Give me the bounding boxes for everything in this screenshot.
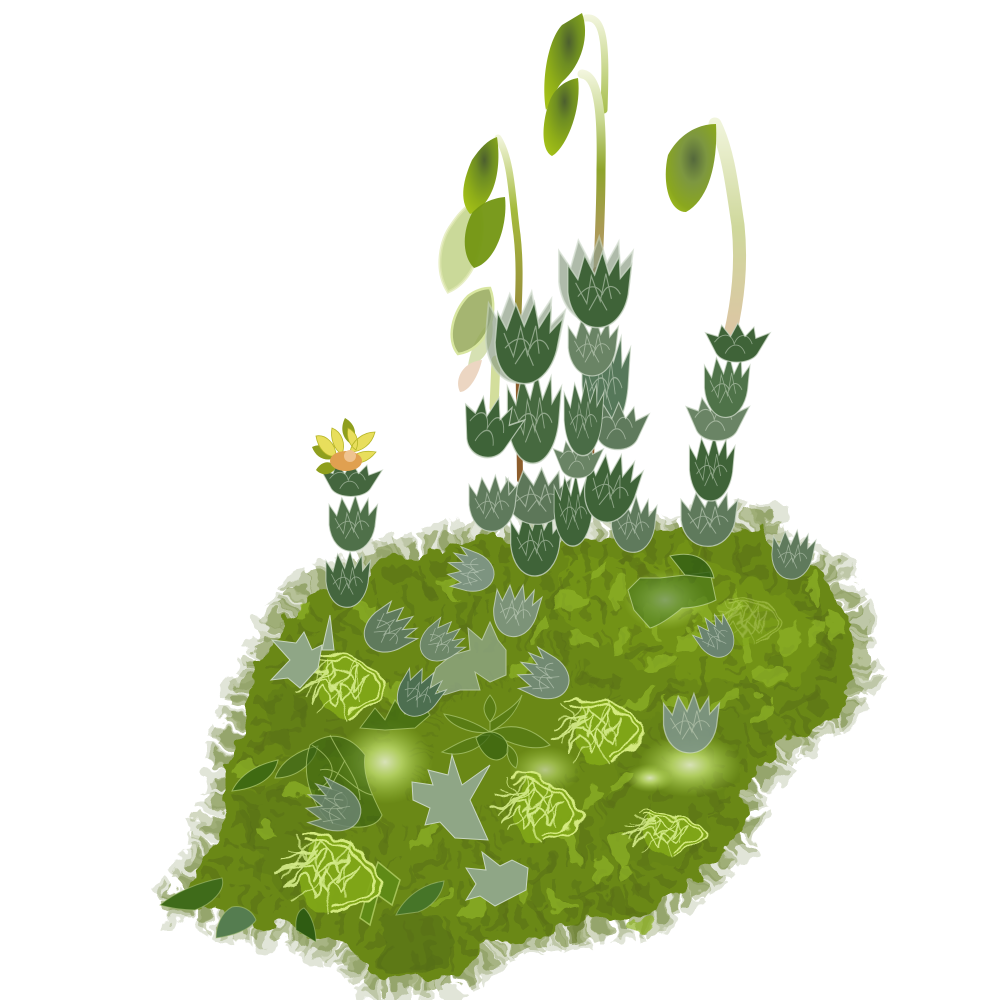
moss base: pale outer fringe	[172, 520, 862, 982]
capsules	[440, 13, 716, 392]
moss leaflets: bright green	[233, 558, 850, 933]
moss bed	[172, 520, 862, 982]
gametophyte shoot: small left	[321, 462, 382, 607]
green cup tufts with pale scribbles	[271, 597, 782, 922]
moss texture: concentric dabs	[206, 542, 827, 958]
small dark leaves lower left	[160, 862, 444, 942]
gametophyte shoot: right	[681, 323, 770, 546]
moss base: olive body	[179, 524, 855, 977]
moss leaflets: dark olive strokes	[247, 546, 836, 969]
stem segments	[518, 270, 596, 500]
pale sage leaves	[271, 615, 528, 906]
glow spots	[337, 570, 742, 804]
flower	[312, 418, 376, 474]
gametophyte shoot: centre	[553, 236, 657, 552]
grey-green tufts on moss	[299, 528, 817, 839]
gametophyte shoot: left	[453, 288, 572, 576]
capsule stems	[494, 18, 740, 408]
dark leaf cluster upper right	[628, 554, 716, 628]
dark leaf cluster left	[232, 698, 430, 827]
dark leaf rosette center	[442, 695, 550, 768]
